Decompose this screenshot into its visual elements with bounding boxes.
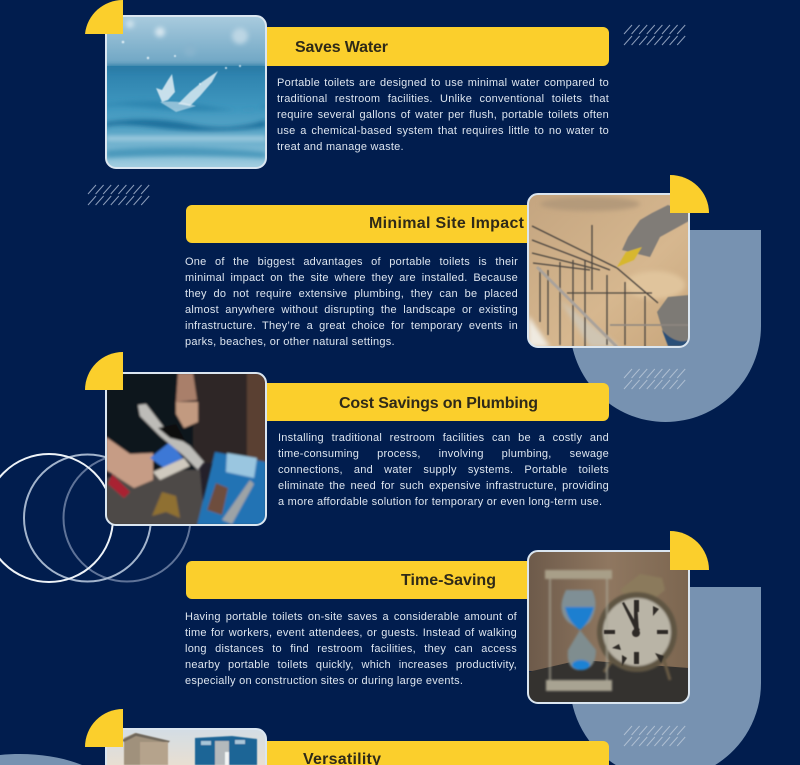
section 2: body text bbox=[185, 256, 518, 348]
section 3: heading bar: Cost Savings on Plumbing bbox=[339, 395, 538, 412]
section 1: photo frame bbox=[106, 16, 266, 168]
section 4: body text: nearby portable toilets quickly, which increases productivity, bbox=[185, 659, 517, 671]
section 3: photo of plumber at work bbox=[106, 373, 266, 525]
section 1: photo of water splash bbox=[105, 16, 266, 168]
overlapping outline circles bbox=[0, 454, 190, 582]
section 2: body text: they do not require extensive plumbing, they can be placed bbox=[185, 288, 518, 300]
section 2: heading bar: Minimal Site Impact bbox=[369, 215, 525, 232]
section 2: body text: almost anywhere without disrupting the landscape or existing bbox=[185, 304, 518, 316]
section 3: heading bar bbox=[266, 383, 609, 421]
section 4: yellow quarter circle bbox=[670, 531, 709, 570]
section 3: body text: eliminate the need for such expensive infrastructure, providing bbox=[278, 480, 609, 492]
hatch pattern on blue shape, section 4 bbox=[624, 726, 685, 746]
hatch pattern on blue shape, section 2 bbox=[624, 369, 685, 389]
section 3: yellow quarter circle bbox=[85, 352, 123, 390]
section 2: body text: One of the biggest advantages of portable toilets is their bbox=[185, 256, 518, 268]
section 2: body text: parks, beaches, or other natural settings. bbox=[185, 336, 395, 348]
section 4: heading bar: Time-Saving bbox=[401, 572, 496, 589]
section 1: body text: traditional restroom facilities. Unlike conventional toilets that bbox=[277, 93, 609, 105]
section 3: photo frame bbox=[106, 373, 266, 525]
section 3: body text bbox=[278, 432, 609, 508]
section 1: heading bar: Saves Water bbox=[295, 39, 388, 56]
section 1: body text: Portable toilets are designed to use minimal water compared to bbox=[277, 77, 609, 89]
section 5: photo of portable toilet cabins bbox=[106, 729, 266, 765]
section 1: body text: use a chemical-based system that requires little to no water to bbox=[277, 125, 609, 137]
section 4: body text: Having portable toilets on-site saves a considerable amount of bbox=[185, 611, 517, 623]
hatch pattern, top right bbox=[624, 25, 685, 45]
section 3: body text: a more affordable solution for temporary or even long-term use. bbox=[278, 496, 602, 508]
section 1: body text: require several gallons of water per flush, portable toilets often bbox=[277, 109, 609, 121]
section 2: yellow quarter circle bbox=[670, 175, 709, 213]
section 3: body text: time-consuming process, involving plumbing, sewage bbox=[278, 448, 609, 460]
section 3: body text: Installing traditional restroom facilities can be a costly and bbox=[278, 432, 609, 444]
section 4: heading bar bbox=[186, 561, 530, 599]
section 2: photo of steel rebar cage bbox=[528, 194, 689, 347]
section 1: body text: treat and manage waste. bbox=[277, 141, 404, 153]
section 4: body text bbox=[185, 611, 517, 687]
section 1: body text bbox=[277, 77, 609, 153]
decorative blue U shape, section 4 bbox=[570, 587, 761, 765]
section 5: yellow quarter circle bbox=[85, 709, 123, 747]
section 4: body text: time for workers, event attendees, or guests. Instead of walking bbox=[185, 627, 517, 639]
section 2: body text: minimal impact on the site where they are installed. Because bbox=[185, 272, 518, 284]
section 4: body text: especially on construction sites or during large events. bbox=[185, 675, 463, 687]
section 3: body text: connections, and water supply systems. Portable toilets bbox=[278, 464, 609, 476]
section 4: photo of hourglass and alarm clock bbox=[528, 551, 689, 703]
section 5: photo frame bbox=[106, 729, 266, 765]
section 1: heading bar bbox=[266, 27, 609, 66]
section 2: body text: infrastructure. They’re a great choice for temporary events in bbox=[185, 320, 518, 332]
section 4: body text: long distances to find restroom facilities, they can access bbox=[185, 643, 517, 655]
section 1: yellow quarter circle bbox=[85, 0, 123, 34]
section 2: heading bar bbox=[186, 205, 530, 243]
section 4: photo frame bbox=[528, 551, 689, 703]
section 2: photo frame bbox=[528, 194, 689, 347]
hatch pattern, section 2 left bbox=[88, 185, 149, 205]
section 5: heading bar bbox=[266, 741, 609, 765]
decorative blue U shape, section 2 bbox=[570, 230, 761, 422]
decorative blue circle, bottom left bbox=[0, 754, 82, 765]
